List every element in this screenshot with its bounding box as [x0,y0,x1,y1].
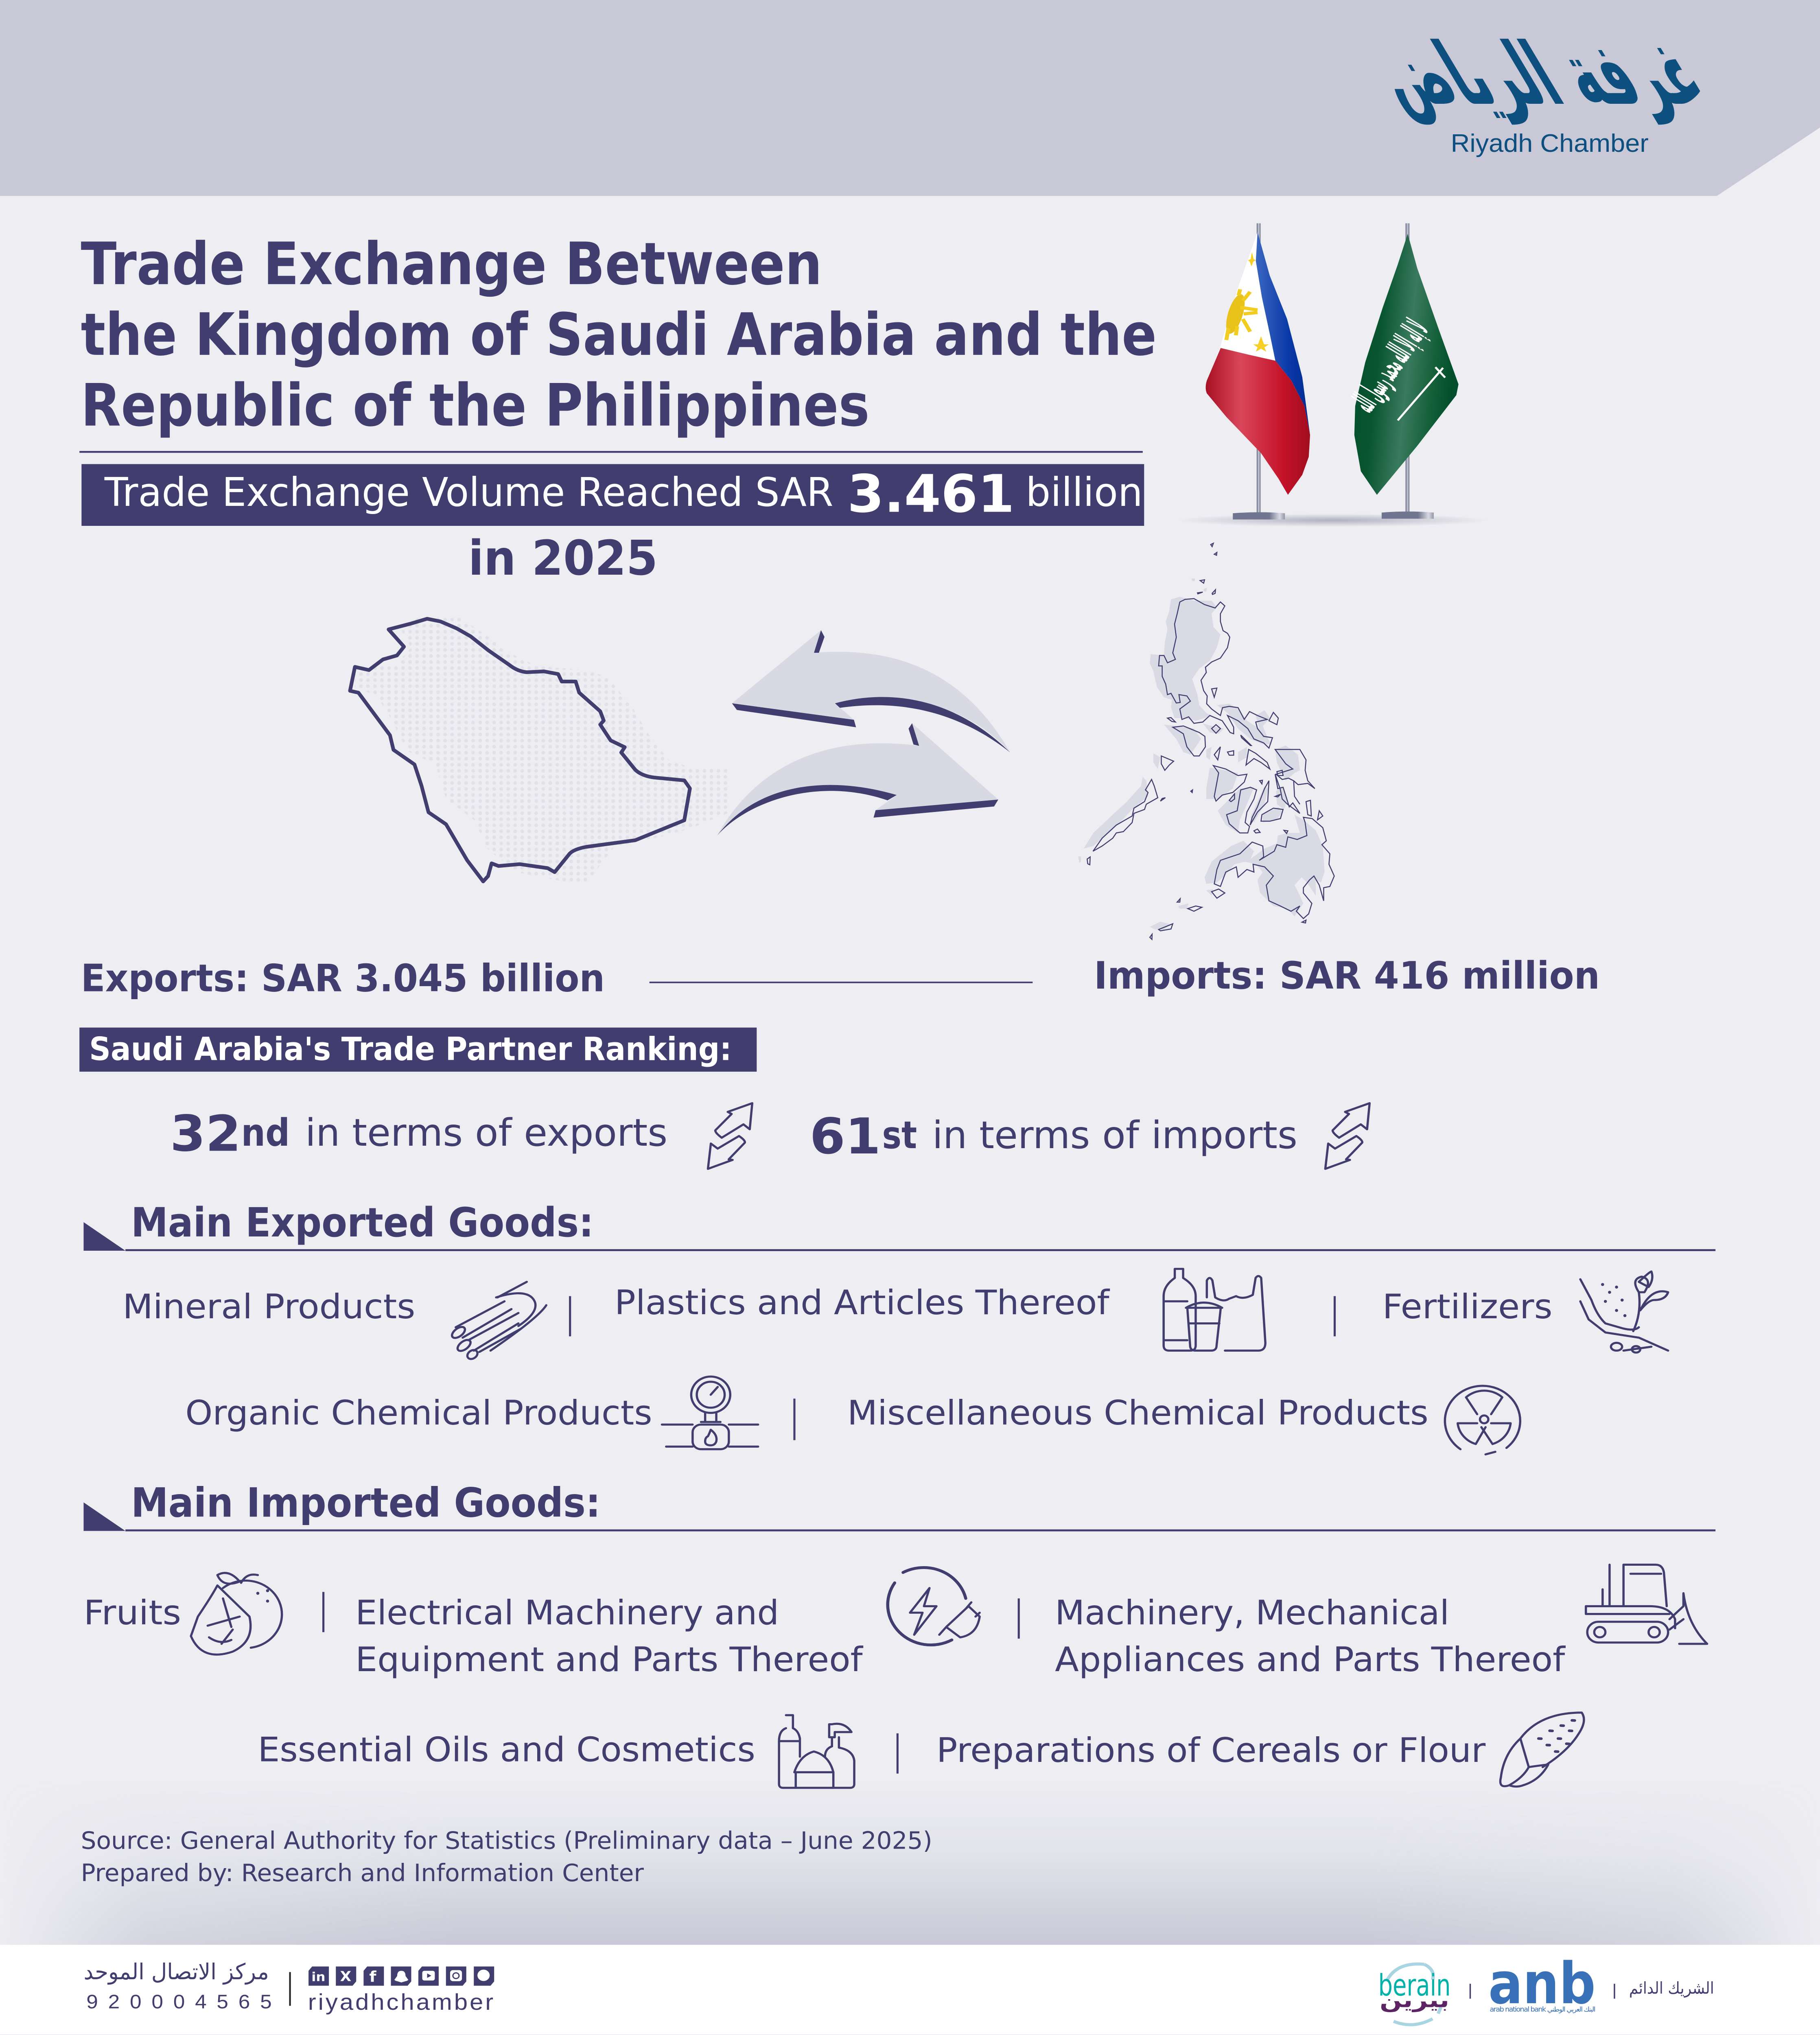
heading: main exported goods [83,1199,1715,1251]
item: plastics: Plastics and Articles Thereof [615,1283,1110,1322]
social icons: X [340,1969,351,1985]
exports figure: Exports: SAR 3.045 billion [81,956,605,1000]
icon: spray, pump and jar [779,1715,854,1788]
item: cereals: Preparations of Cereals or Flour [936,1731,1486,1770]
icon: exchange arrows [1325,1103,1369,1169]
item: mineral products: Mineral Products [122,1287,415,1326]
year label: in 2025 [468,530,658,586]
title: the Kingdom of Saudi Arabia and the [81,301,1157,369]
flag shadow [1176,514,1488,527]
title rule [79,451,1143,453]
banner: trade volume: billion [1026,469,1143,515]
title [81,230,1157,440]
separator [1018,1598,1020,1639]
water ring [1387,1964,1441,2025]
item: plastics [615,1269,1265,1350]
banner: trade volume: 3.461 [847,464,1015,524]
arrow: bottom, pointing right [717,723,998,836]
logo: berain [1378,1964,1451,2025]
Saudi flag [1354,223,1459,519]
item: organic chemicals [185,1376,758,1449]
ranking heading: Saudi Arabia's Trade Partner Ranking: [89,1031,732,1068]
social icons [308,1967,494,1986]
banner: trade volume [81,464,1144,526]
landmass fill [1078,578,1325,930]
footer: contact centre [83,1959,272,2013]
permanent partner label: الشريك الدائم [1629,1979,1714,1998]
heading: main imported goods: Main Imported Goods: [131,1480,601,1527]
arrow: top, pointing left [732,630,1010,753]
rank: exports: nd [241,1111,290,1155]
item: organic chemicals: Organic Chemical Products [185,1394,652,1433]
banner: trade volume: Trade Exchange Volume Reached SAR [104,469,833,515]
social icons: f [369,1968,376,1985]
social icons: in [311,1970,326,1984]
icon: exchange arrows [708,1103,752,1169]
coast outlines [1087,543,1334,939]
map: Saudi Arabia [350,616,730,884]
separator [897,1733,899,1774]
Saudi outline [350,619,690,882]
icon: hand with seedling [1580,1271,1668,1352]
header band [0,0,1820,196]
title: Trade Exchange Between [81,230,822,298]
social handle: riyadhchamber [308,1990,493,2015]
rank: exports: in terms of exports [305,1111,667,1155]
icon: cables [450,1282,546,1361]
item: fruits: Fruits [83,1593,181,1632]
item: mineral products [122,1282,546,1361]
item: machinery: Machinery, Mechanical [1055,1593,1449,1632]
map: Philippines [1078,543,1334,939]
footer separator [289,1972,291,2006]
source notes [81,1827,932,1887]
item: machinery [1055,1565,1707,1679]
item: cereals [936,1713,1584,1787]
item: fruits [83,1573,282,1654]
item: miscellaneous chemicals: Miscellaneous Chemical Products [847,1394,1428,1433]
exchange arrows [717,630,1010,836]
item: fertilizers: Fertilizers [1382,1287,1553,1326]
item: machinery: Appliances and Parts Thereof [1055,1640,1566,1679]
rank: imports: in terms of imports [932,1113,1297,1157]
icon: bulldozer [1586,1565,1707,1644]
item: electrical machinery: Electrical Machinery and [355,1593,779,1632]
item: electrical machinery [355,1567,980,1679]
Philippines flag [1206,223,1310,519]
footer separator [1470,1984,1471,1999]
source notes: Source: General Authority for Statistics (Preliminary data – June 2025) [81,1827,932,1855]
footer separator [1614,1984,1615,1999]
icon: power plug and bolt [888,1567,980,1645]
logo: anb: anb [1488,1951,1596,2017]
item: cosmetics [258,1715,854,1788]
rank: exports [170,1103,752,1169]
icon: bottle, cup and bag [1164,1269,1265,1350]
item: fertilizers [1382,1271,1668,1352]
rank: imports: st [882,1113,917,1157]
separator [1334,1296,1336,1336]
separator [793,1398,796,1440]
heading: main exported goods: Main Exported Goods: [131,1199,594,1246]
heading: main imported goods [83,1480,1715,1532]
separator [569,1296,571,1336]
text: لا إله إلا الله محمد رسول الله [1343,313,1437,419]
separator [322,1592,324,1632]
logo: anb: arab national bank البنك العربي الوطني [1490,2006,1596,2013]
footer: contact centre: 920004565 [86,1991,272,2013]
footer: social media [308,1967,494,2015]
connecting rule [650,982,1032,983]
berain arabic: بيرين [1380,1988,1449,2012]
icon: orange and slice [191,1573,282,1654]
item: electrical machinery: Equipment and Parts Thereof [355,1640,863,1679]
item: miscellaneous chemicals [847,1386,1520,1454]
icon: corn [1500,1713,1584,1787]
logo: Riyadh Chamber [1350,24,1725,157]
icon: radiation [1445,1386,1520,1454]
item: cosmetics: Essential Oils and Cosmetics [258,1730,755,1770]
sword [1398,367,1445,420]
logo wordmark: Riyadh Chamber [1451,129,1649,157]
dot pattern [355,616,730,884]
source notes: Prepared by: Research and Information Center [81,1859,644,1887]
rank: imports: 61 [809,1107,881,1165]
footer band [0,1945,1820,2034]
footer: contact centre: مركز الاتصال الموحد [83,1959,269,1985]
bottom gradient shading [44,1833,1776,1945]
imports figure: Imports: SAR 416 million [1094,954,1600,998]
rank: exports: 32 [170,1105,241,1162]
rank: imports [809,1103,1369,1169]
berain latin: berain [1378,1967,1451,2002]
title: Republic of the Philippines [81,372,870,440]
icon: gauge and pipe [662,1376,758,1449]
flags [1176,223,1488,527]
